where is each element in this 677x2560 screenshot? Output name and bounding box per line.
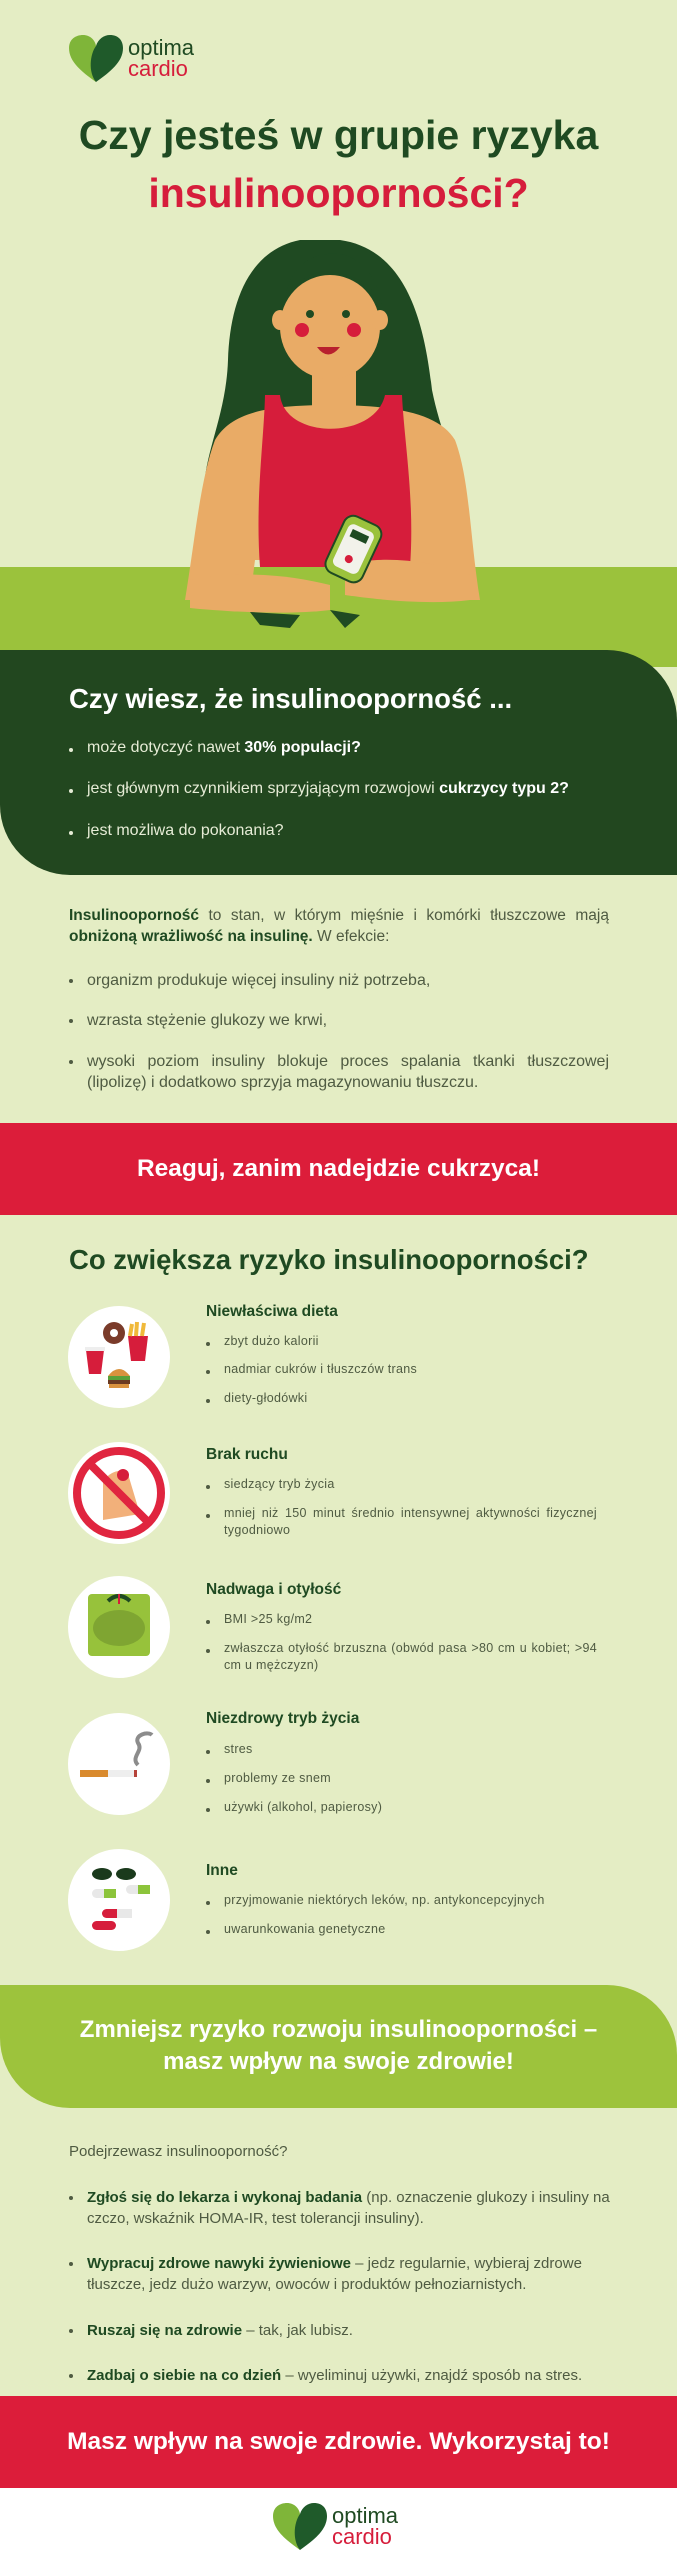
risk item: overweight: BMI >25 kg/m2	[224, 1612, 312, 1626]
banner: take action	[0, 2396, 677, 2488]
panel: reduce risk: masz wpływ na swoje zdrowie!	[163, 2048, 514, 2075]
risk item: unhealthy lifestyle: używki (alkohol, papierosy)	[224, 1800, 382, 1814]
risk item: diet: zbyt dużo kalorii	[224, 1334, 319, 1348]
logo top	[69, 35, 194, 82]
risk item: overweight: Nadwaga i otyłość	[206, 1581, 341, 1598]
illustration: woman with glucometer	[185, 240, 480, 628]
list: facts	[69, 739, 569, 839]
list: effects	[69, 972, 609, 1091]
list: actions	[69, 2189, 610, 2384]
risk item: diet	[68, 1303, 417, 1408]
risk item: diet: nadmiar cukrów i tłuszczów trans	[224, 1362, 417, 1376]
list: actions: Zgłoś się do lekarza i wykonaj badania (np. oznaczenie glukozy i insuliny na czczo, wskaźnik HOMA-IR, test tolerancji insuliny).	[87, 2189, 610, 2227]
list: facts: może dotyczyć nawet 30% populacji?	[87, 739, 361, 756]
logo bottom	[273, 2503, 398, 2550]
risk item: no movement: Brak ruchu	[206, 1446, 288, 1463]
risk item: no movement	[68, 1442, 597, 1544]
icon: prohibited arm	[68, 1442, 170, 1544]
logo top: optima	[128, 35, 194, 60]
risk item: unhealthy lifestyle: Niezdrowy tryb życia	[206, 1710, 359, 1727]
list: facts: jest możliwa do pokonania?	[87, 822, 284, 839]
panel: did you know	[0, 650, 677, 875]
list: actions: Ruszaj się na zdrowie – tak, jak lubisz.	[87, 2322, 353, 2339]
text block: definition: Insulinooporność to stan, w którym mięśnie i komórki tłuszczowe mają obniżoną wrażliwość na insulinę. W efekcie:	[69, 907, 609, 945]
risk item: other: Inne	[206, 1862, 238, 1879]
list: effects: wzrasta stężenie glukozy we krwi,	[87, 1012, 327, 1029]
risk item: overweight	[68, 1576, 597, 1678]
title: insulinooporności?	[148, 170, 529, 216]
risk item: no movement: siedzący tryb życia	[224, 1477, 335, 1491]
list: actions: Wypracuj zdrowe nawyki żywieniowe – jedz regularnie, wybieraj zdrowe tłuszcze, jedz dużo warzyw, owoców i produktów pełnoziarnistych.	[87, 2255, 582, 2293]
table band	[0, 567, 677, 667]
risk item: other	[68, 1849, 545, 1951]
icon: cigarette	[68, 1713, 170, 1815]
risk item: unhealthy lifestyle	[68, 1710, 382, 1815]
risk item: no movement: mniej niż 150 minut średnio intensywnej aktywności fizycznej tygodniowo	[224, 1506, 597, 1537]
logo top: cardio	[128, 56, 188, 81]
icon: fast food	[68, 1306, 170, 1408]
heading: risk factors: Co zwiększa ryzyko insulinooporności?	[69, 1244, 589, 1275]
text: suspect: Podejrzewasz insulinooporność?	[69, 2143, 287, 2160]
risk item: unhealthy lifestyle: problemy ze snem	[224, 1771, 331, 1785]
banner: react	[0, 1123, 677, 1215]
list: effects: organizm produkuje więcej insuliny niż potrzeba,	[87, 972, 430, 989]
icon: pills	[68, 1849, 170, 1951]
heading: did you know: Czy wiesz, że insulinooporność ...	[69, 683, 512, 714]
risk item: unhealthy lifestyle: stres	[224, 1742, 253, 1756]
risk item: other: przyjmowanie niektórych leków, np. antykoncepcyjnych	[224, 1893, 545, 1907]
risk item: diet: diety-głodówki	[224, 1391, 307, 1405]
icon: scale	[68, 1576, 170, 1678]
banner: take action: Masz wpływ na swoje zdrowie. Wykorzystaj to!	[67, 2428, 610, 2455]
banner: react: Reaguj, zanim nadejdzie cukrzyca!	[137, 1155, 540, 1182]
logo bottom: cardio	[332, 2524, 392, 2549]
risk item: other: uwarunkowania genetyczne	[224, 1922, 385, 1936]
risk item: overweight: zwłaszcza otyłość brzuszna (obwód pasa >80 cm u kobiet; >94 cm u mężczyzn)	[224, 1641, 597, 1672]
list: facts: jest głównym czynnikiem sprzyjającym rozwojowi cukrzycy typu 2?	[87, 780, 569, 797]
risk item: diet: Niewłaściwa dieta	[206, 1303, 338, 1320]
list: actions: Zadbaj o siebie na co dzień – wyeliminuj używki, znajdź sposób na stres.	[87, 2367, 582, 2384]
title: Czy jesteś w grupie ryzyka	[79, 112, 598, 158]
footer	[0, 2488, 677, 2560]
panel: reduce risk	[0, 1985, 677, 2108]
title	[79, 112, 599, 216]
list: effects: wysoki poziom insuliny blokuje proces spalania tkanki tłuszczowej (lipolizę) i dodatkowo sprzyja magazynowaniu tłuszczu.	[87, 1053, 609, 1091]
logo bottom: optima	[332, 2503, 398, 2528]
panel: reduce risk: Zmniejsz ryzyko rozwoju insulinooporności –	[80, 2016, 597, 2043]
